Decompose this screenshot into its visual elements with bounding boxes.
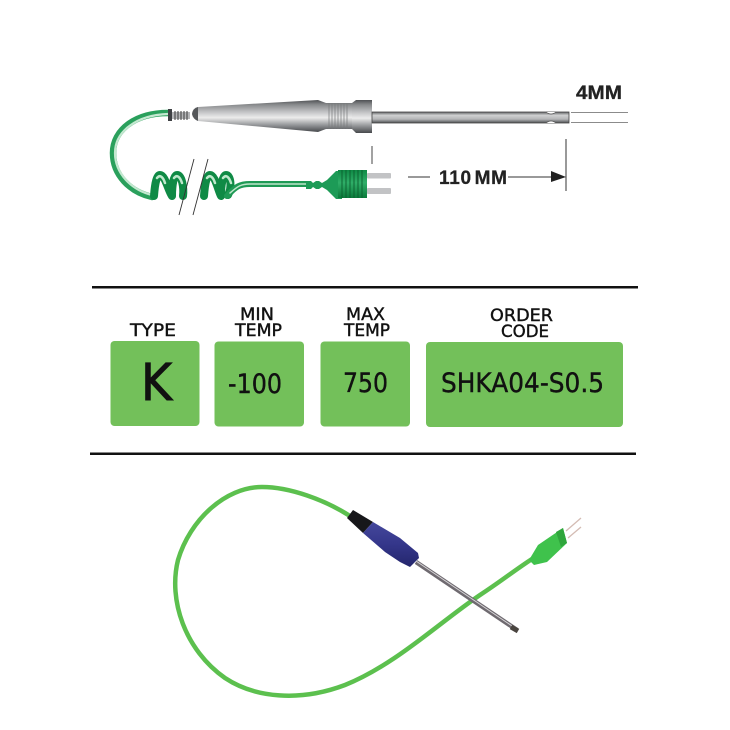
column: min temp: -100 — [228, 369, 282, 400]
top rule — [92, 286, 638, 288]
plug connector — [306, 170, 391, 199]
column: min temp — [214, 305, 304, 426]
column: min temp: TEMP — [234, 321, 282, 341]
probe shaft — [372, 112, 569, 123]
dimension: 110MM with arrow — [372, 139, 566, 191]
column: max temp: MAX — [346, 305, 385, 325]
green cable loop — [175, 487, 532, 696]
column: type: K — [141, 354, 173, 413]
product photo: probe with green cable — [175, 487, 581, 696]
column: order code: ORDER — [490, 306, 553, 326]
photo plug connector — [529, 518, 581, 565]
column: min temp: MIN — [240, 305, 274, 325]
dimension: 4MM — [571, 83, 628, 122]
shaft tip — [511, 627, 518, 631]
column: type: TYPE — [129, 321, 176, 341]
specification table — [90, 286, 638, 455]
column: order code: CODE — [501, 322, 549, 342]
dimension: 4MM: 4MM — [576, 83, 622, 104]
probe handle — [192, 100, 372, 133]
diagram: probe technical drawing — [113, 83, 628, 215]
photo blue handle — [363, 522, 419, 567]
column: type — [110, 321, 200, 426]
column: max temp: 750 — [343, 368, 388, 399]
dimension: 110MM with arrow: 110 MM — [439, 168, 507, 189]
column: max temp — [320, 305, 410, 426]
photo metal shaft — [416, 562, 517, 630]
column: order code: SHKA04-S0.5 — [441, 368, 604, 399]
column: max temp: TEMP — [343, 321, 390, 341]
photo black boot — [347, 510, 373, 533]
strain relief spring — [168, 109, 190, 121]
column: order code — [426, 306, 623, 427]
cable coil and curve — [113, 113, 306, 197]
bottom rule — [90, 452, 636, 455]
break marks — [179, 159, 208, 215]
